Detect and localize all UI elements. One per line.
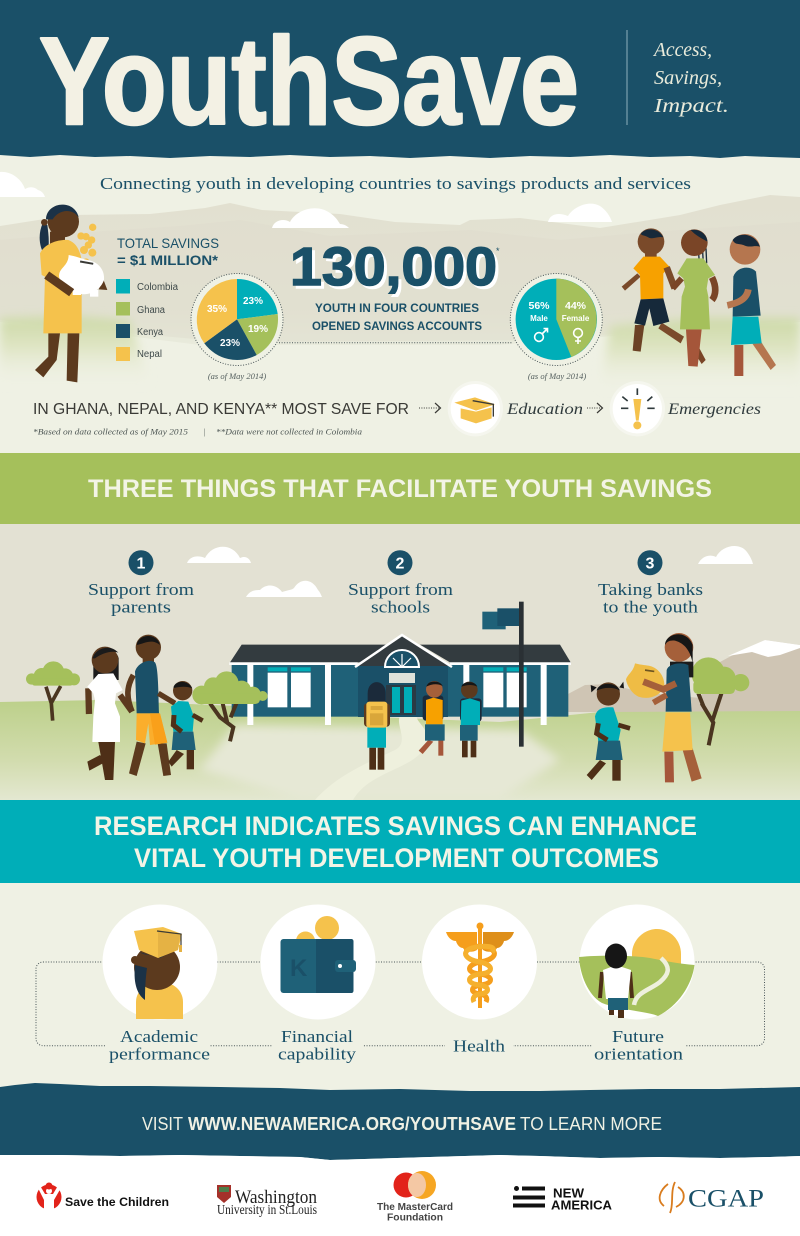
big number: 130,000 bbox=[293, 240, 500, 300]
logo: New America bbox=[513, 1186, 613, 1212]
number badge: 2 bbox=[396, 556, 405, 572]
header tagline: Impact. bbox=[653, 95, 729, 117]
illustration: students at school bbox=[364, 681, 482, 770]
total savings heading: TOTAL SAVINGS bbox=[117, 235, 219, 251]
legend: Nepal bbox=[137, 349, 162, 360]
label: financial capability bbox=[278, 1027, 357, 1064]
panel: three things background bbox=[0, 524, 800, 801]
logo: CGAP: CGAP bbox=[688, 1186, 764, 1212]
mountain bbox=[568, 640, 800, 712]
illustration: family of three bbox=[87, 635, 203, 780]
label: financial capability: capability bbox=[278, 1044, 357, 1064]
pie chart: savings by country: 19% bbox=[248, 324, 268, 335]
number badge: 1 bbox=[137, 556, 146, 572]
header divider bbox=[626, 30, 628, 125]
panel: overview background bbox=[0, 172, 800, 390]
logo: MasterCard Foundation bbox=[377, 1171, 453, 1224]
pie chart: gender: Female bbox=[562, 314, 590, 323]
banner heading: THREE THINGS THAT FACILITATE YOUTH SAVINGS bbox=[88, 475, 712, 503]
pie chart: savings by country: 23% bbox=[243, 296, 263, 307]
step 1 bbox=[88, 550, 194, 616]
label: financial capability: Financial bbox=[281, 1027, 353, 1046]
legend: Kenya bbox=[137, 327, 163, 338]
outcome: future orientation bbox=[579, 904, 694, 1020]
header band bbox=[0, 0, 800, 158]
logo: Washington University in St. Louis: University in St.Louis bbox=[217, 1202, 317, 1217]
call to action: TO LEARN MORE bbox=[520, 1114, 662, 1134]
cloud: right bbox=[548, 204, 612, 222]
gender chart date: (as of May 2014) bbox=[528, 371, 586, 381]
cloud bbox=[187, 547, 251, 563]
son bbox=[168, 681, 203, 769]
girl with yellow backpack bbox=[364, 682, 390, 770]
header tagline: Access, bbox=[652, 39, 712, 61]
logo: Save the Children bbox=[36, 1182, 169, 1210]
step label: parents bbox=[111, 598, 171, 616]
banner heading: RESEARCH INDICATES SAVINGS CAN ENHANCE bbox=[94, 811, 697, 841]
pie chart: savings by country: 35% bbox=[207, 304, 227, 315]
pie chart date: (as of May 2014) bbox=[208, 371, 266, 381]
label: future orientation: Future bbox=[612, 1027, 664, 1046]
dotted connector bbox=[36, 962, 764, 1046]
step label bbox=[88, 580, 194, 616]
icon: female symbol bbox=[574, 329, 582, 344]
logo: MasterCard Foundation: The MasterCard bbox=[377, 1201, 453, 1213]
big number caption: OPENED SAVINGS ACCOUNTS bbox=[312, 321, 482, 333]
pie chart: savings by country bbox=[191, 274, 283, 366]
pie chart: gender bbox=[510, 274, 602, 366]
icon: male symbol bbox=[535, 328, 548, 341]
big number: * bbox=[496, 246, 500, 256]
number badge: 3 bbox=[646, 556, 655, 572]
footnotes: **Data were not collected in Colombia bbox=[216, 428, 362, 436]
illustration: woman with piggy bank bbox=[35, 205, 107, 382]
step 2 bbox=[348, 550, 453, 616]
banner: research bbox=[0, 800, 800, 883]
big number caption bbox=[312, 303, 482, 333]
boy in orange bbox=[622, 228, 684, 352]
header tagline: Savings, bbox=[654, 67, 722, 89]
step label: Support from bbox=[88, 580, 194, 599]
footnotes: *Based on data collected as of May 2015 bbox=[33, 428, 188, 436]
total savings heading: = $1 MILLION* bbox=[117, 252, 219, 268]
outcome: financial capability bbox=[260, 904, 376, 1020]
piggy bank bbox=[626, 663, 664, 698]
step label: Taking banks bbox=[598, 580, 703, 599]
banner: three things bbox=[0, 453, 800, 524]
label: emergencies: Emergencies bbox=[667, 401, 761, 418]
step label bbox=[598, 580, 703, 616]
logo: Washington University in St. Louis bbox=[217, 1185, 317, 1217]
illustration: tree near family bbox=[192, 671, 268, 741]
label: academic performance: Academic bbox=[120, 1027, 199, 1046]
label: future orientation bbox=[594, 1027, 684, 1064]
woman bbox=[643, 633, 702, 782]
subtitle: Connecting youth in developing countries to savings products and services bbox=[100, 174, 691, 193]
banner heading bbox=[94, 811, 697, 873]
label: academic performance: performance bbox=[109, 1044, 210, 1064]
panel: outcomes bbox=[36, 904, 764, 1065]
pie chart: savings by country: 23% bbox=[220, 338, 240, 349]
footnotes: | bbox=[203, 428, 205, 436]
logo: Save the Children: Save the Children bbox=[65, 1197, 169, 1209]
call to action bbox=[142, 1114, 662, 1134]
illustration: three walking youths bbox=[622, 228, 776, 376]
label: future orientation: orientation bbox=[594, 1044, 684, 1064]
logo: New America: AMERICA bbox=[551, 1198, 613, 1212]
illustration: tree right bbox=[692, 657, 749, 745]
logo strip background bbox=[0, 1155, 800, 1236]
footnotes bbox=[33, 428, 362, 436]
header tagline bbox=[652, 39, 729, 117]
left wing bbox=[229, 645, 387, 725]
central gable bbox=[355, 635, 452, 717]
label: health: Health bbox=[453, 1036, 506, 1056]
icon: graduation cap bbox=[448, 381, 503, 436]
connector line between pie charts bbox=[279, 342, 513, 344]
banner heading: VITAL YOUTH DEVELOPMENT OUTCOMES bbox=[134, 843, 659, 873]
pie chart: gender: Male bbox=[530, 314, 548, 323]
step 3 bbox=[598, 550, 703, 616]
footer band bbox=[0, 1083, 800, 1160]
path to school bbox=[315, 716, 427, 800]
pie chart: gender: 56% bbox=[528, 300, 550, 312]
illustration: woman and girl with piggy bank bbox=[587, 633, 702, 782]
label: education: Education bbox=[506, 401, 583, 418]
arrow bbox=[419, 403, 440, 413]
illustration: tree left bbox=[26, 661, 80, 721]
boy with teal shirt bbox=[460, 682, 482, 757]
mother bbox=[87, 647, 132, 780]
title: YouthSave bbox=[39, 13, 579, 151]
outcome: academic performance bbox=[102, 904, 218, 1020]
step label bbox=[348, 580, 453, 616]
logo: Washington University in St. Louis: Washington bbox=[235, 1187, 317, 1208]
icon: exclamation mark bbox=[610, 381, 665, 436]
savings goals row bbox=[33, 381, 761, 436]
boy in blue shirt bbox=[727, 234, 776, 376]
big number caption: YOUTH IN FOUR COUNTRIES bbox=[315, 303, 479, 315]
outcome: health bbox=[422, 904, 537, 1020]
illustration: school building bbox=[229, 602, 571, 747]
big number: 130,000 bbox=[290, 237, 497, 297]
cloud bbox=[246, 581, 322, 597]
logo: CGAP bbox=[660, 1182, 764, 1213]
cloud: centre bbox=[272, 208, 349, 228]
cloud bbox=[698, 546, 753, 564]
legend bbox=[116, 279, 178, 361]
right wing bbox=[420, 645, 571, 725]
arrow bbox=[587, 403, 602, 413]
ground bbox=[0, 700, 800, 801]
boy with orange shirt bbox=[419, 681, 445, 756]
girl bbox=[587, 682, 630, 781]
girl in green dress bbox=[673, 229, 715, 367]
savings statement: IN GHANA, NEPAL, AND KENYA** MOST SAVE FOR bbox=[33, 401, 409, 418]
step label: schools bbox=[371, 598, 430, 616]
step label: to the youth bbox=[603, 598, 699, 616]
call to action: VISIT bbox=[142, 1114, 183, 1134]
flagpole and banners bbox=[482, 602, 524, 747]
legend: Colombia bbox=[137, 282, 178, 293]
step label: Support from bbox=[348, 580, 453, 599]
logo: MasterCard Foundation: Foundation bbox=[387, 1212, 443, 1224]
logo: New America: NEW bbox=[553, 1186, 585, 1200]
legend: Ghana bbox=[137, 305, 165, 316]
cloud: top left bbox=[0, 172, 45, 197]
call to action: WWW.NEWAMERICA.ORG/YOUTHSAVE bbox=[188, 1114, 516, 1134]
pie chart: gender: 44% bbox=[565, 300, 587, 312]
total savings heading bbox=[117, 235, 219, 268]
father bbox=[128, 635, 175, 776]
text backing bbox=[105, 1030, 686, 1065]
outcome: financial capability: K bbox=[290, 955, 308, 982]
label: academic performance bbox=[109, 1027, 210, 1064]
